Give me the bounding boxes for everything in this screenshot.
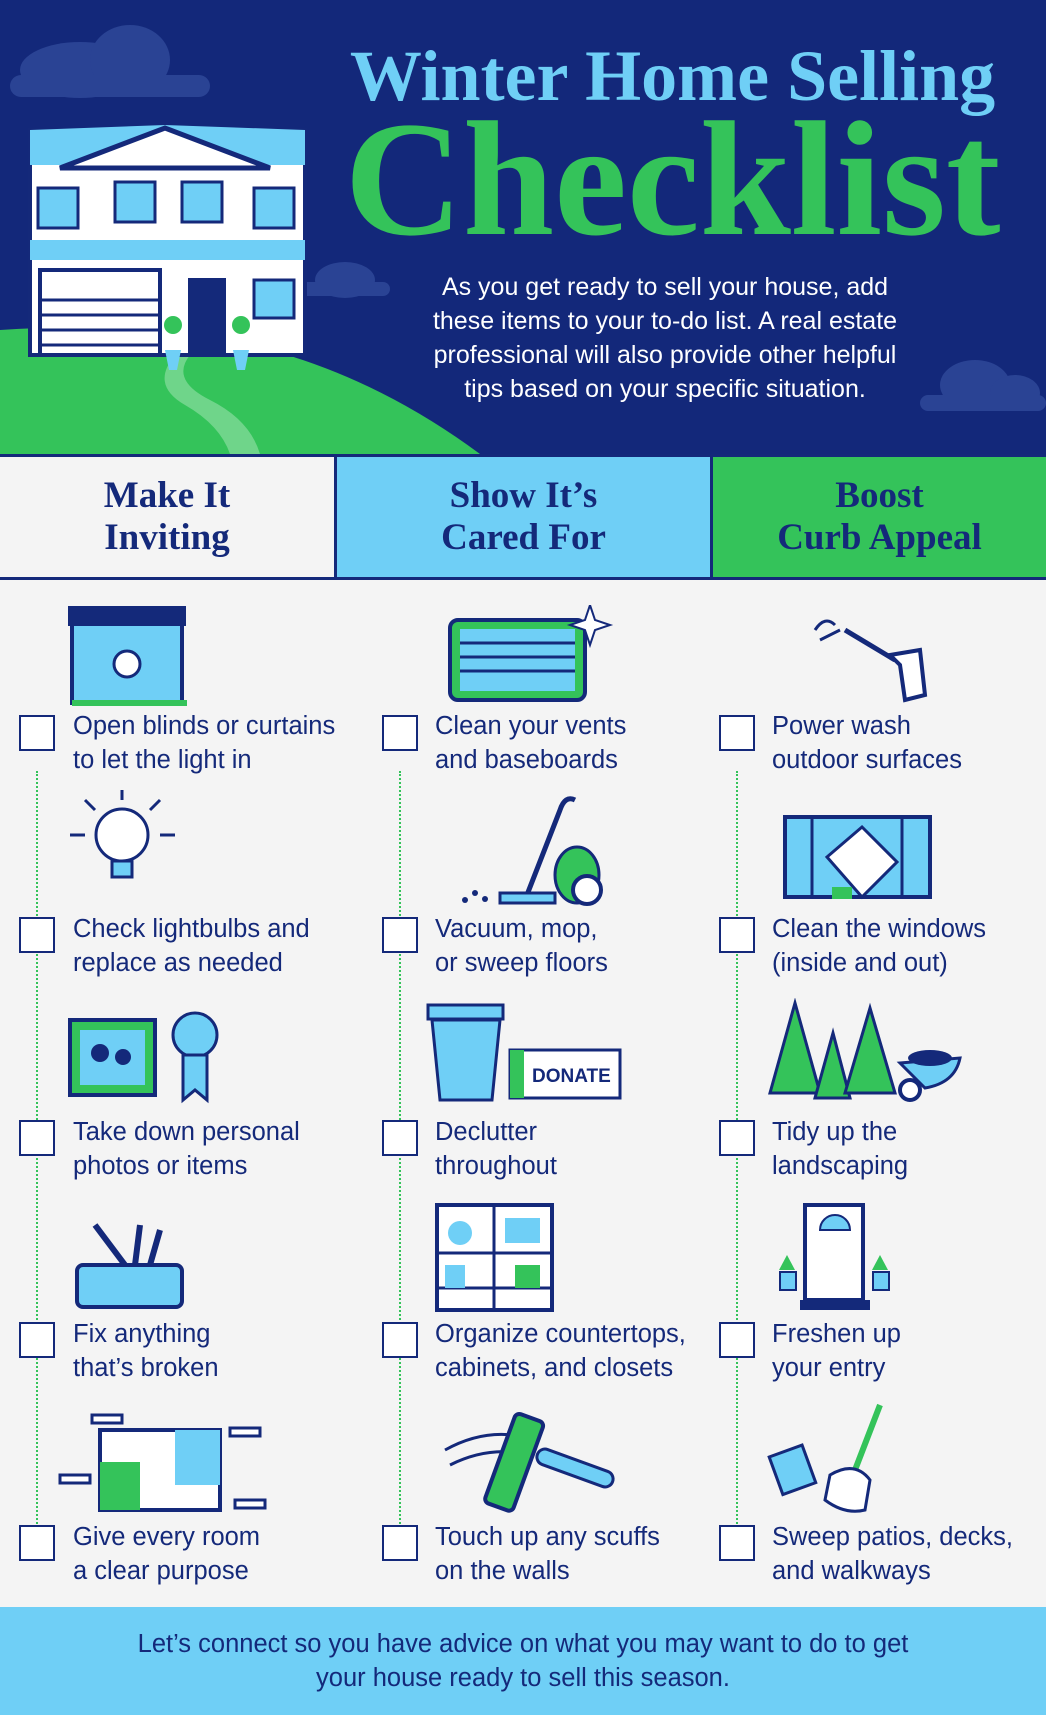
text: Freshen up <box>772 1320 901 1348</box>
text: on the walls <box>435 1557 570 1585</box>
column header: Show It's Cared For: Show It’s <box>450 475 597 516</box>
text: Organize countertops, <box>435 1320 686 1348</box>
intro text: As you get ready to sell your house, add <box>442 273 888 301</box>
text: Power wash <box>772 712 911 740</box>
header background <box>0 0 1046 454</box>
icons column 3 <box>814 620 928 702</box>
text: outdoor surfaces <box>772 746 962 774</box>
column header: Make It Inviting: Make It <box>104 475 230 516</box>
text: Fix anything <box>73 1320 210 1348</box>
column header: Make It Inviting: Inviting <box>104 517 230 558</box>
icons column 1 <box>68 606 187 706</box>
text: Give every room <box>73 1523 260 1551</box>
column header: Boost Curb Appeal <box>713 454 1046 580</box>
icons column 2 <box>448 605 613 702</box>
intro text: these items to your to-do list. A real estate <box>433 307 897 335</box>
text: to let the light in <box>73 746 252 774</box>
text: that’s broken <box>73 1354 219 1382</box>
text: Check lightbulbs and <box>73 915 310 943</box>
text: Open blinds or curtains <box>73 712 335 740</box>
text: DONATE <box>532 1066 611 1087</box>
footer: Let’s connect so you have advice on what you may want to do to get <box>138 1630 908 1658</box>
text: throughout <box>435 1152 557 1180</box>
column header: Boost Curb Appeal: Boost <box>835 475 924 516</box>
text: a clear purpose <box>73 1557 249 1585</box>
footer: your house ready to sell this season. <box>316 1664 730 1692</box>
intro text: professional will also provide other helpful <box>434 341 896 369</box>
text: replace as needed <box>73 949 283 977</box>
text: and baseboards <box>435 746 618 774</box>
text: Take down personal <box>73 1118 300 1146</box>
column header: Boost Curb Appeal: Curb Appeal <box>777 517 982 558</box>
text: Tidy up the <box>772 1118 897 1146</box>
text: cabinets, and closets <box>435 1354 673 1382</box>
text: or sweep floors <box>435 949 608 977</box>
text: landscaping <box>772 1152 908 1180</box>
title: Winter Home Selling <box>350 36 995 116</box>
text: and walkways <box>772 1557 931 1585</box>
text: Declutter <box>435 1118 537 1146</box>
column header: Make It Inviting <box>0 454 334 580</box>
checklist items <box>19 715 55 751</box>
column header: Show It's Cared For: Cared For <box>441 517 606 558</box>
cloud right <box>920 360 1046 411</box>
text: (inside and out) <box>772 949 948 977</box>
text: Vacuum, mop, <box>435 915 598 943</box>
intro text <box>433 273 897 403</box>
text: Clean the windows <box>772 915 986 943</box>
column header: Show It's Cared For <box>334 454 713 580</box>
text: photos or items <box>73 1152 247 1180</box>
text: Touch up any scuffs <box>435 1523 660 1551</box>
text: Clean your vents <box>435 712 626 740</box>
dotted guide lines <box>36 771 38 1531</box>
text: your entry <box>772 1354 885 1382</box>
intro text: tips based on your specific situation. <box>464 375 866 403</box>
illustration: house on hill <box>0 25 480 454</box>
text: Sweep patios, decks, <box>772 1523 1013 1551</box>
title: Checklist: Checklist <box>344 89 1000 270</box>
footer <box>0 1607 1046 1715</box>
